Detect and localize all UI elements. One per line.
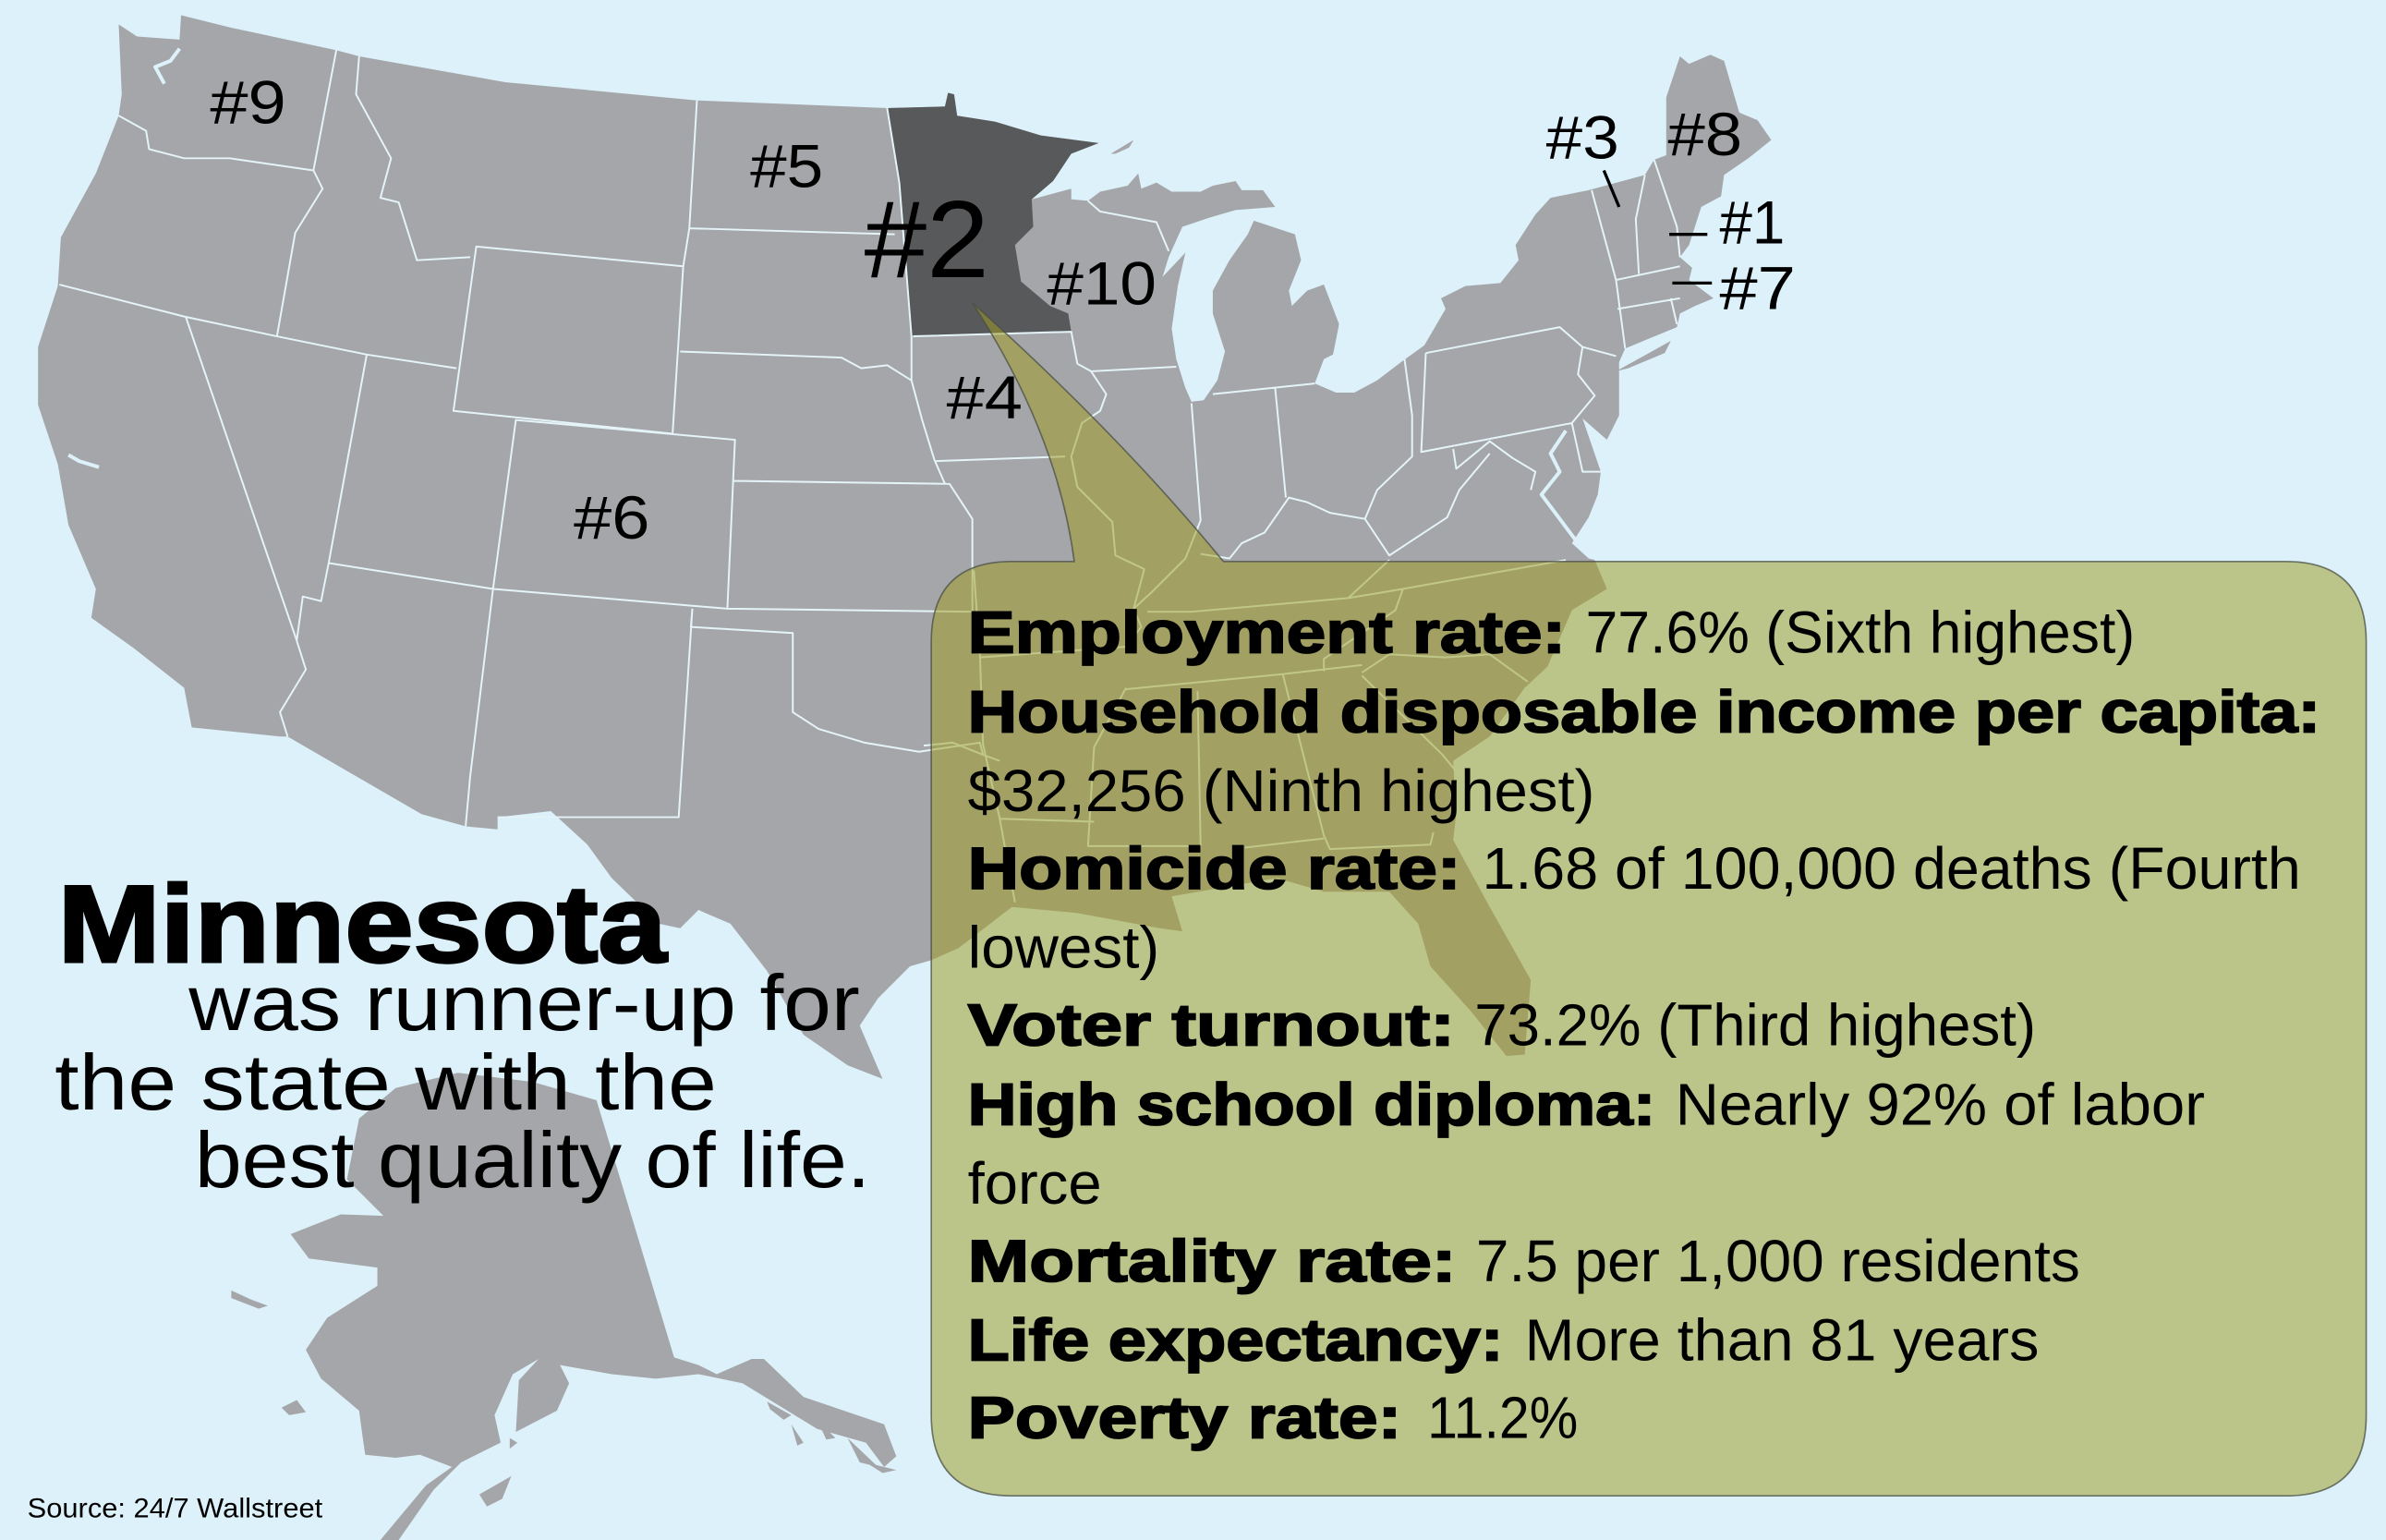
stat: homicide rate: Homicide rate: <box>968 835 1460 902</box>
stat: household disposable income: Household disposable income per capita: <box>968 678 2320 745</box>
stat: life expectancy: Life expectancy: <box>968 1307 1504 1374</box>
stat: employment rate <box>968 600 2135 666</box>
stat: high school diploma <box>968 1071 2205 1217</box>
stat: employment rate: Employment rate: <box>968 600 1566 666</box>
map: state borders <box>59 50 1680 903</box>
stat: voter turnout: Voter turnout: <box>968 992 1455 1059</box>
stat: employment rate: 77.6% (Sixth highest) <box>1586 600 2135 666</box>
stat: homicide rate: lowest) <box>968 915 1159 981</box>
rank 3: #3 <box>1546 103 1619 171</box>
map: Alaska <box>291 1073 896 1540</box>
stat: high school diploma: force <box>968 1150 1102 1217</box>
map: Lake Michigan <box>1163 207 1275 402</box>
rank 4: #4 <box>947 363 1023 431</box>
leader lines for small states <box>1604 170 1712 283</box>
stat: voter turnout: 73.2% (Third highest) <box>1474 992 2036 1059</box>
stat: poverty rate: Poverty rate: <box>968 1385 1401 1451</box>
rank 10: #10 <box>1047 249 1157 317</box>
stat: homicide rate <box>968 835 2301 981</box>
stat: mortality rate <box>968 1228 2080 1294</box>
map: United States <box>38 15 1771 1540</box>
stat: voter turnout <box>968 992 2036 1059</box>
map: lower 48 states <box>38 15 1771 1079</box>
stat: mortality rate: 7.5 per 1,000 residents <box>1476 1228 2080 1294</box>
source note: Source: 24/7 Wallstreet <box>28 1493 323 1523</box>
stat: life expectancy: More than 81 years <box>1525 1307 2039 1374</box>
map: Isle Royale <box>1111 140 1133 153</box>
rank 8: #8 <box>1667 100 1742 168</box>
stat: household disposable income: $32,256 (Ninth highest) <box>968 758 1594 824</box>
stat: high school diploma: Nearly 92% of labor <box>1676 1071 2205 1137</box>
rank 9: #9 <box>210 67 286 136</box>
stat: homicide rate: 1.68 of 100,000 deaths (Fourth <box>1482 835 2301 902</box>
subheading line: the state with the: the state with the <box>55 1038 717 1127</box>
subheading line: was runner-up for: was runner-up for <box>188 959 860 1048</box>
heading: Minnesota: Minnesota <box>58 864 668 986</box>
subheading line: best quality of life: best quality of life. <box>195 1116 870 1205</box>
stat: household disposable income <box>968 678 2320 824</box>
rank 6: #6 <box>574 483 649 552</box>
stat: high school diploma: High school diploma: <box>968 1071 1655 1137</box>
rank labels <box>210 67 1796 552</box>
rank 5: #5 <box>750 132 823 200</box>
map: Minnesota highlighted <box>887 92 1098 336</box>
map: Alaskan islands <box>231 1291 896 1507</box>
stat: poverty rate <box>968 1385 1578 1451</box>
stat: mortality rate: Mortality rate: <box>968 1228 1456 1294</box>
map: Long Island <box>1616 341 1671 371</box>
callout panel with pointer to Minnesota <box>931 303 2367 1496</box>
map: Puget Sound, San Francisco Bay and Chesapeake Bay <box>68 49 1578 543</box>
stat: life expectancy <box>968 1307 2039 1374</box>
callout statistics text <box>968 600 2320 1451</box>
stat: poverty rate: 11.2% <box>1427 1385 1578 1451</box>
rank 7: #7 <box>1719 253 1796 321</box>
rank 2: #2 <box>865 179 989 301</box>
rank 1: #1 <box>1719 188 1785 257</box>
